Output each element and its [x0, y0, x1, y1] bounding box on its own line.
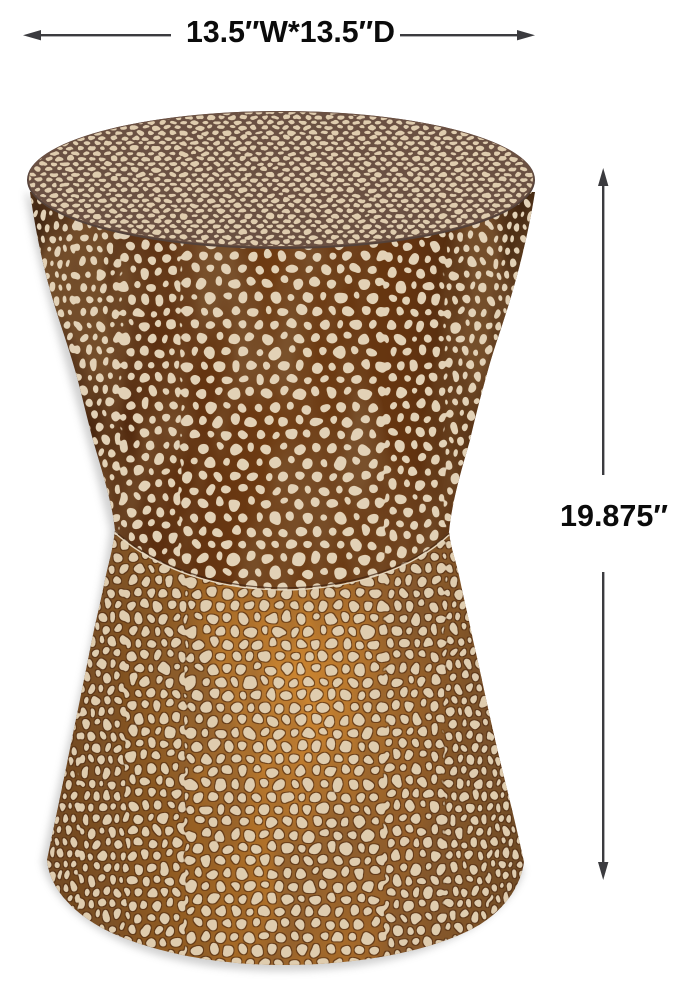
- width arrow left: [23, 30, 171, 40]
- table top: [27, 111, 535, 249]
- lower cone of table: [47, 530, 524, 965]
- table illustration: [15, 100, 550, 980]
- width label: 13.5″W*13.5″D: [186, 15, 395, 49]
- table soft shadow: [25, 190, 524, 971]
- width arrow right: [400, 30, 535, 40]
- upper cone of table: [30, 192, 535, 590]
- width dimension: [23, 15, 535, 49]
- height label: 19.875″: [560, 499, 668, 533]
- height arrow down: [598, 572, 608, 880]
- height arrow up: [598, 168, 608, 475]
- height dimension: [560, 168, 668, 880]
- waist seam: [115, 531, 449, 590]
